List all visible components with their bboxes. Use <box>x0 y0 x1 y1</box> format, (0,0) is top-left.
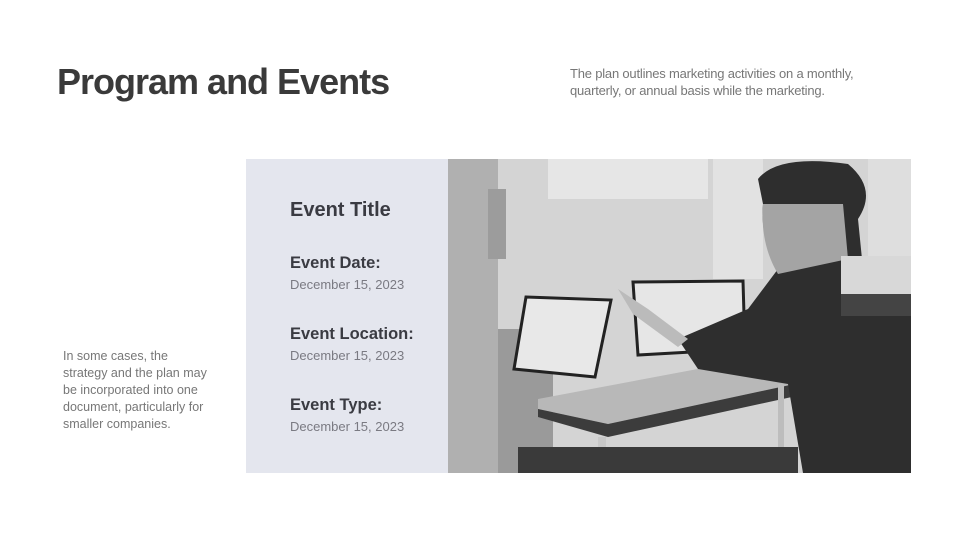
subtitle text: The plan outlines marketing activities on a monthly, quarterly, or annual basis while the marketing. <box>570 66 853 98</box>
title: Program and Events <box>57 61 389 102</box>
side note text <box>63 349 207 431</box>
field: event location: Event Location: <box>290 325 414 343</box>
field: event location <box>290 325 414 363</box>
side note text: smaller companies. <box>63 417 171 431</box>
heading: event title: Event Title <box>290 199 391 221</box>
field: event type: December 15, 2023 <box>290 419 404 434</box>
panel: event details <box>246 159 449 473</box>
side note text: In some cases, the <box>63 349 168 363</box>
field: event location: December 15, 2023 <box>290 348 404 363</box>
table <box>538 329 911 424</box>
side note text: document, particularly for <box>63 400 203 414</box>
field: event date <box>290 254 404 292</box>
photo: people with laptops <box>448 159 911 473</box>
field: event type <box>290 396 404 434</box>
laptops <box>514 297 611 377</box>
field: event type: Event Type: <box>290 396 382 414</box>
field: event date: December 15, 2023 <box>290 277 404 292</box>
person right <box>678 161 911 473</box>
side note text: be incorporated into one <box>63 383 198 397</box>
side note text: strategy and the plan may <box>63 366 207 380</box>
field: event date: Event Date: <box>290 254 381 272</box>
